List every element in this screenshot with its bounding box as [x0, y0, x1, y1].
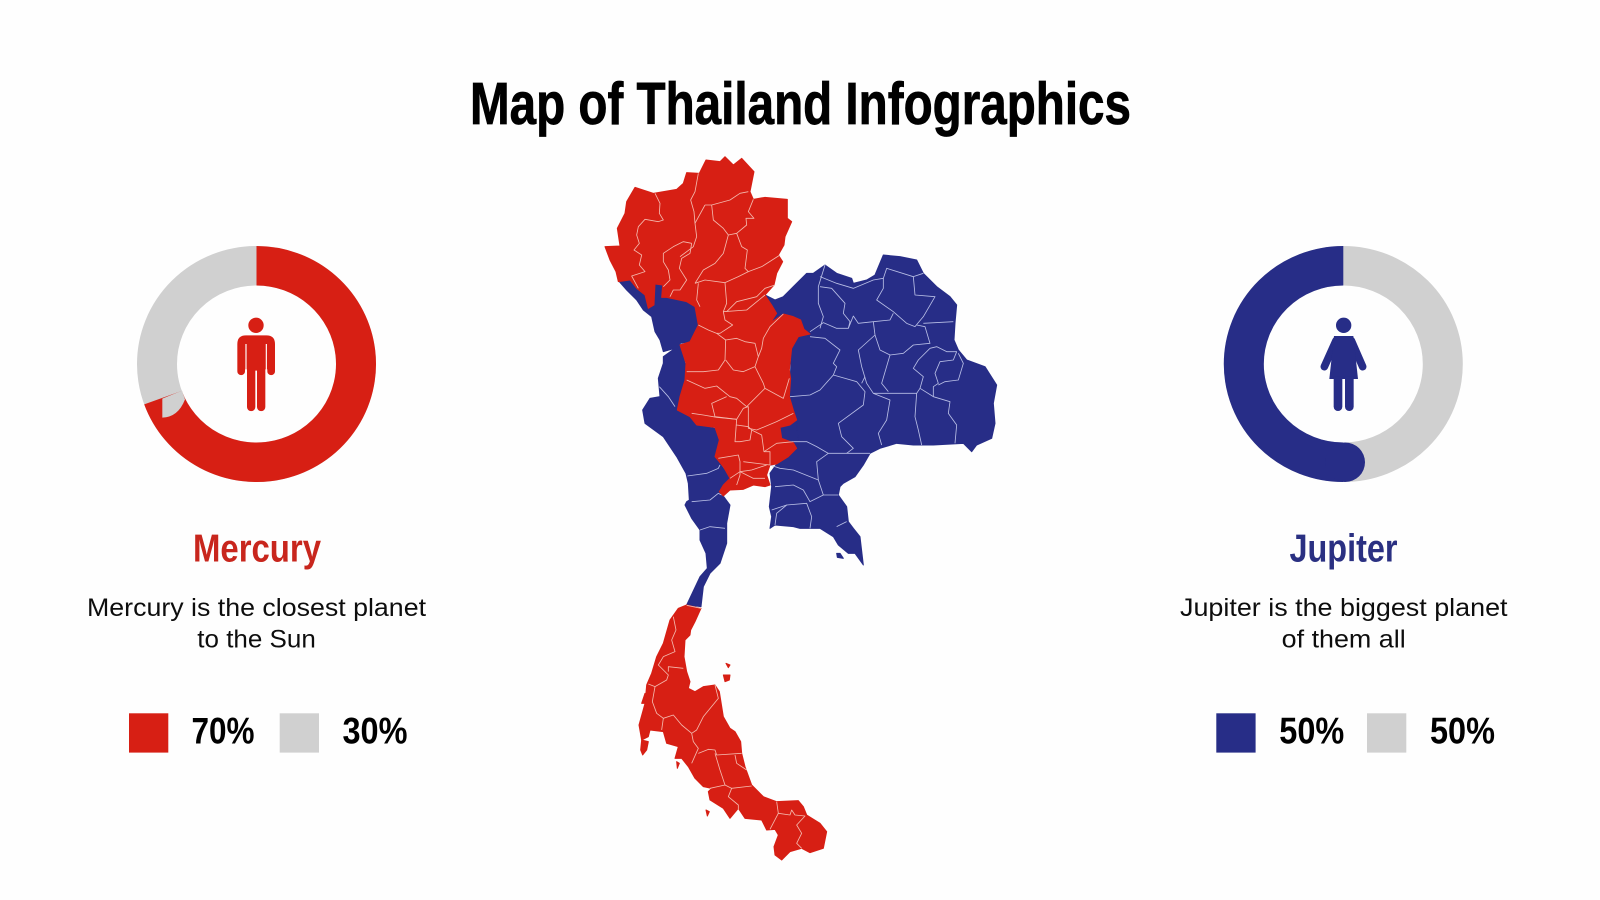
panel: Mercury	[87, 266, 426, 753]
map: red northern region borders	[632, 173, 793, 485]
legend: Mercury: 30%	[342, 710, 408, 752]
text: Jupiter description	[1180, 594, 1508, 654]
text: Jupiter description: of them all	[1282, 626, 1406, 654]
map: blue region borders	[659, 265, 963, 530]
legend: Mercury	[129, 710, 408, 753]
text: Jupiter description: Jupiter is the biggest planet	[1180, 594, 1508, 622]
panel: Jupiter	[1180, 266, 1508, 753]
legend: Mercury: 70%	[192, 710, 254, 752]
heading: Jupiter: Jupiter	[1290, 528, 1398, 570]
text: Mercury description	[87, 594, 426, 654]
text: Mercury description: Mercury is the closest planet	[87, 594, 426, 622]
heading: Mercury: Mercury	[193, 528, 321, 570]
map: red southern regions	[639, 605, 827, 860]
map: red northern and central regions	[605, 157, 810, 496]
icon: woman	[1324, 318, 1363, 411]
title: Map of Thailand Infographics	[470, 71, 1131, 137]
donut chart: Jupiter 50%	[1244, 266, 1443, 482]
text: Mercury description: to the Sun	[197, 626, 316, 654]
icon: man	[237, 318, 275, 411]
map: Thailand	[605, 157, 997, 860]
legend: Jupiter: 50%	[1279, 710, 1344, 752]
legend: Jupiter: 50%	[1430, 710, 1495, 752]
map: blue regions	[619, 255, 997, 607]
legend: Jupiter	[1216, 710, 1495, 753]
donut chart: Mercury 70%	[157, 266, 356, 462]
